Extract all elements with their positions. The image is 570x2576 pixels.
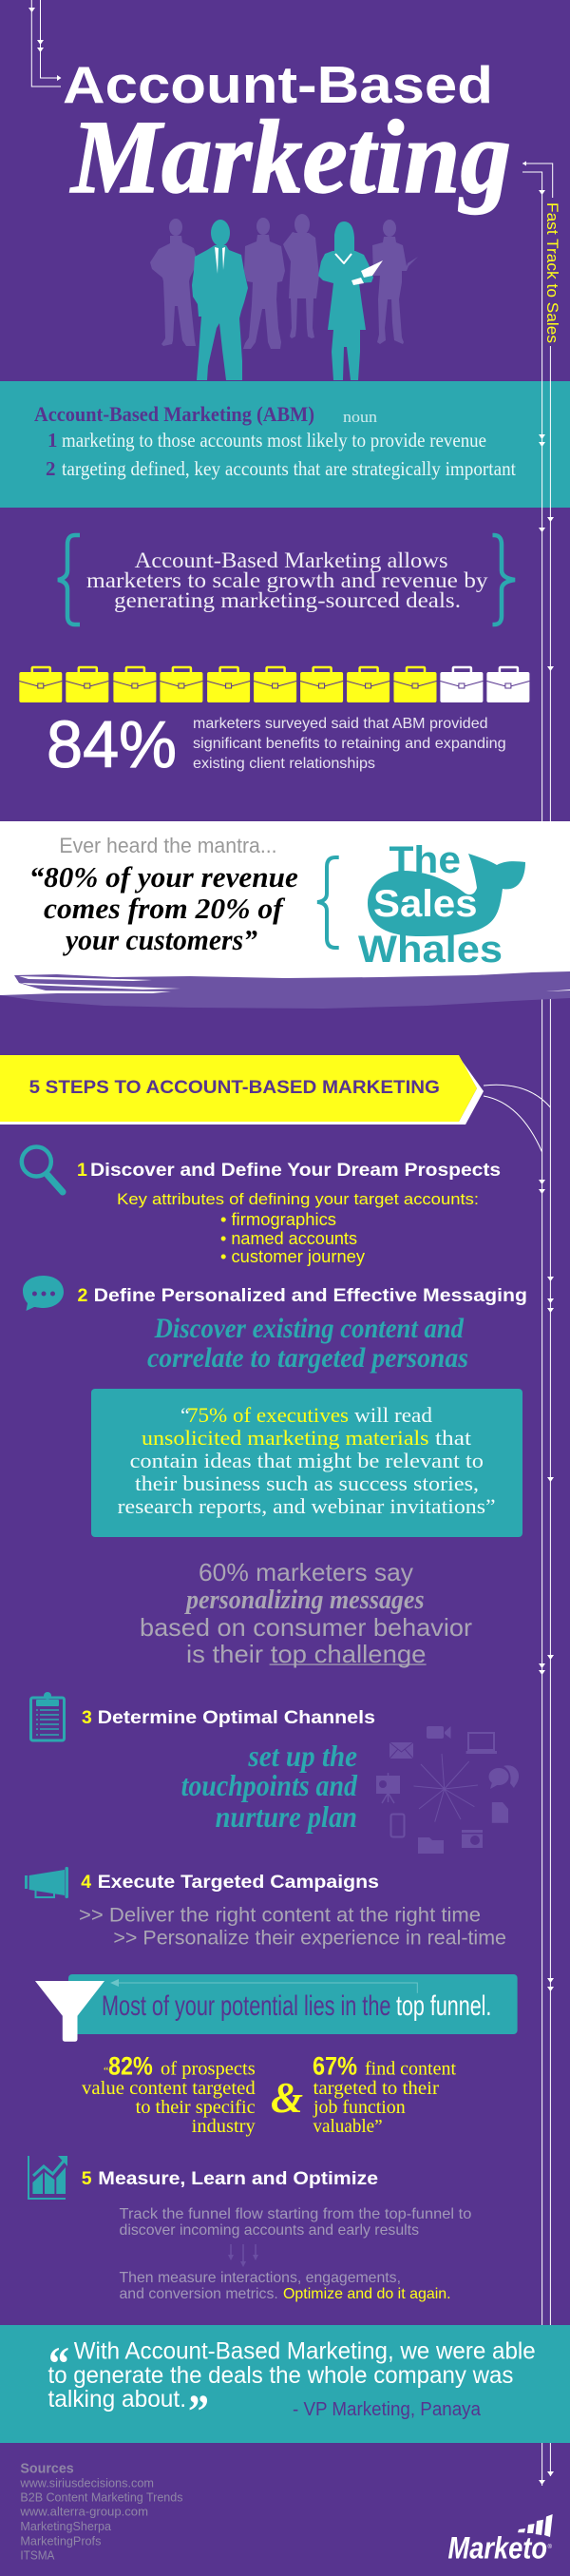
stat: 82 percent of prospects: to their specific [136,2097,256,2118]
sources list: Sources [20,2461,74,2477]
definition text [34,402,516,480]
step 1 key attributes: • firmographics [220,1210,336,1229]
step 5 body text two [120,2270,451,2302]
step 1 key attributes: Key attributes of defining your target accounts: [117,1190,479,1208]
panel: testimonial band: With Account-Based Marketing, we were able [74,2338,536,2365]
panel: testimonial band: - VP Marketing, Panaya [293,2399,482,2420]
side label: fast track to sales: Fast Track to Sales [543,202,561,343]
step 5 heading: Measure, Learn and Optimize [98,2168,378,2189]
stat: 60 percent marketers: personalizing messages [184,1586,425,1615]
stat: 84 percent: marketers surveyed said that ABM provided [193,716,488,732]
stat: 67 percent find content: job function [313,2097,406,2118]
logo: the sales whales: Whales [358,929,503,971]
step 1 heading: 1 [77,1160,87,1181]
stat: 82 percent of prospects: of prospects [161,2059,256,2080]
step 5 body text two: Optimize and do it again. [283,2286,451,2302]
icon: megaphone [25,1867,68,1898]
sources list: MarketingProfs [20,2534,101,2547]
icon wheel: marketing channels [376,1726,519,1854]
stat: 84 percent [47,707,506,781]
step 1 key attributes [117,1190,479,1266]
step 3 script text: set up the [247,1739,357,1773]
panel: testimonial band: to generate the deals the whole company was [48,2362,513,2389]
step 4 heading: Execute Targeted Campaigns [98,1872,379,1893]
panel: testimonial band: ” [188,2384,209,2437]
sources list: ITSMA [20,2549,55,2563]
callout: scale growth statement with braces: Account-Based Marketing allows [135,548,448,572]
definition text: marketing to those accounts most likely to provide revenue [62,429,486,452]
stat: 82 percent of prospects: “ [104,2065,108,2078]
stat: 60 percent marketers [140,1558,472,1668]
text: mantra quote: comes from 20% of [44,892,285,925]
panel: top funnel callout: Most of your potential lies in the [102,1990,390,2022]
panel: 75 percent executives quote: 75% of executives [187,1403,349,1427]
panel: testimonial band: “ [48,2336,69,2390]
logo: marketo [448,2514,553,2566]
panel: 75 percent executives quote: contain ideas that might be relevant to [130,1449,484,1472]
step 3 script text [181,1739,358,1834]
icon: growth chart [28,2156,67,2199]
stat: 82 percent of prospects: 82% [108,2052,153,2081]
title: Marketing [69,99,511,215]
step 3 heading: 3 [82,1707,92,1728]
panel: definition band background [0,381,570,508]
step 1 key attributes: • customer journey [220,1247,365,1266]
callout: scale growth statement with braces: generating marketing-sourced deals. [114,588,461,612]
panel: testimonial band: talking about. [48,2386,186,2413]
step 5 body text one: discover incoming accounts and early results [120,2222,419,2239]
icon: speech bubble [23,1276,64,1311]
panel: 75 percent executives quote [91,1389,522,1537]
sources list: MarketingSherpa [20,2520,111,2533]
icon: magnifier [22,1146,63,1192]
panel: 75 percent executives quote: “ [180,1403,190,1427]
text: mantra quote: Ever heard the mantra... [59,834,277,857]
sources list: B2B Content Marketing Trends [20,2491,183,2505]
stat: 60 percent marketers: 60% marketers say [199,1558,413,1586]
stat: 82 percent of prospects [82,2052,256,2137]
text: mantra quote: “80% of your revenue [29,860,298,894]
definition text: 1 [48,429,57,452]
callout: scale growth statement with braces: marketers to scale growth and revenue by [86,568,488,592]
title [63,55,511,215]
panel: top funnel callout [35,1974,518,2042]
step 2 script subheading [147,1313,468,1374]
step 2 script subheading: Discover existing content and [154,1313,465,1344]
step 3 script text: touchpoints and [181,1768,358,1802]
step 1 heading: Discover and Define Your Dream Prospects [90,1160,501,1181]
panel: testimonial band [0,2325,570,2443]
panel: 75 percent executives quote: unsolicited marketing materials [142,1426,429,1450]
chart: 84 percent briefcases [19,667,529,702]
step 5 body text one [120,2206,471,2239]
banner: 5 steps heading [0,1055,484,1125]
definition text: 2 [46,457,55,480]
stat: 60 percent marketers: based on consumer behavior [140,1613,472,1642]
panel: 75 percent executives quote: their business such as success stories, [135,1471,479,1495]
text: mantra quote [29,834,298,956]
step 3 heading: Determine Optimal Channels [98,1707,375,1728]
stat: 84 percent: 84% [47,707,177,781]
stat: 67 percent find content: targeted to their [314,2078,439,2099]
stat: 67 percent find content: 67% [313,2052,357,2081]
stat: 60 percent marketers: is their top challenge [186,1640,426,1668]
step 5 body text one: Track the funnel flow starting from the top-funnel to [120,2206,471,2222]
stat: 67 percent find content [313,2052,456,2137]
panel: 75 percent executives quote: research reports, and webinar invitations” [118,1494,496,1518]
step 1 key attributes: • named accounts [220,1229,357,1248]
step 3 script text: nurture plan [216,1799,357,1834]
stat: 82 percent of prospects: industry [192,2116,256,2137]
logo: the sales whales: The [390,839,461,881]
panel: 75 percent executives quote: that [435,1426,471,1450]
step 5 body text two: Then measure interactions, engagements, [120,2270,401,2286]
definition text: noun [343,408,378,426]
step 4 bullet lines [79,1905,506,1950]
step 2 heading: Define Personalized and Effective Messaging [94,1285,527,1306]
step 4 bullet lines: >> Personalize their experience in real-time [113,1928,506,1950]
step 2 script subheading: correlate to targeted personas [147,1342,468,1374]
illustration: business people silhouettes [150,214,418,380]
step 5 heading: 5 [82,2168,92,2189]
stat: 82 percent of prospects: value content targeted [82,2078,256,2099]
step 4 heading: 4 [81,1872,91,1893]
banner: 5 steps heading: 5 STEPS TO ACCOUNT-BASED MARKETING [29,1078,440,1098]
logo: marketo: ® [547,2544,553,2550]
stat: 84 percent: existing client relationships [193,756,375,772]
icon: clipboard [30,1692,65,1740]
panel: top funnel callout: top funnel. [396,1990,491,2022]
step 4 bullet lines: >> Deliver the right content at the right time [79,1905,481,1927]
logo: the sales whales [358,839,525,971]
step 5 body text two: and conversion metrics. [120,2286,278,2302]
step 2 heading: 2 [78,1285,87,1306]
arrows: three down arrows [228,2244,258,2267]
panel: 75 percent executives quote: will read [354,1403,432,1427]
logo: marketo: Marketo [448,2531,547,2566]
sources list: www.siriusdecisions.com [19,2477,154,2490]
text: mantra quote: your customers” [62,923,257,956]
panel: mantra white band [0,821,570,1009]
icon: brace [317,857,339,948]
sources list: www.alterra-group.com [19,2506,148,2519]
stat: 67 percent find content: find content [365,2059,456,2080]
definition text: Account-Based Marketing (ABM) [34,402,314,426]
sources list [19,2461,182,2563]
stat: 84 percent: significant benefits to retaining and expanding [193,736,506,752]
title: Account-Based [63,55,493,114]
callout: scale growth statement with braces [58,535,515,625]
logo: the sales whales: Sales [373,883,477,925]
ampersand: & [271,2073,303,2122]
stat: 67 percent find content: valuable” [314,2116,383,2137]
definition text: targeting defined, key accounts that are strategically important [62,457,516,480]
